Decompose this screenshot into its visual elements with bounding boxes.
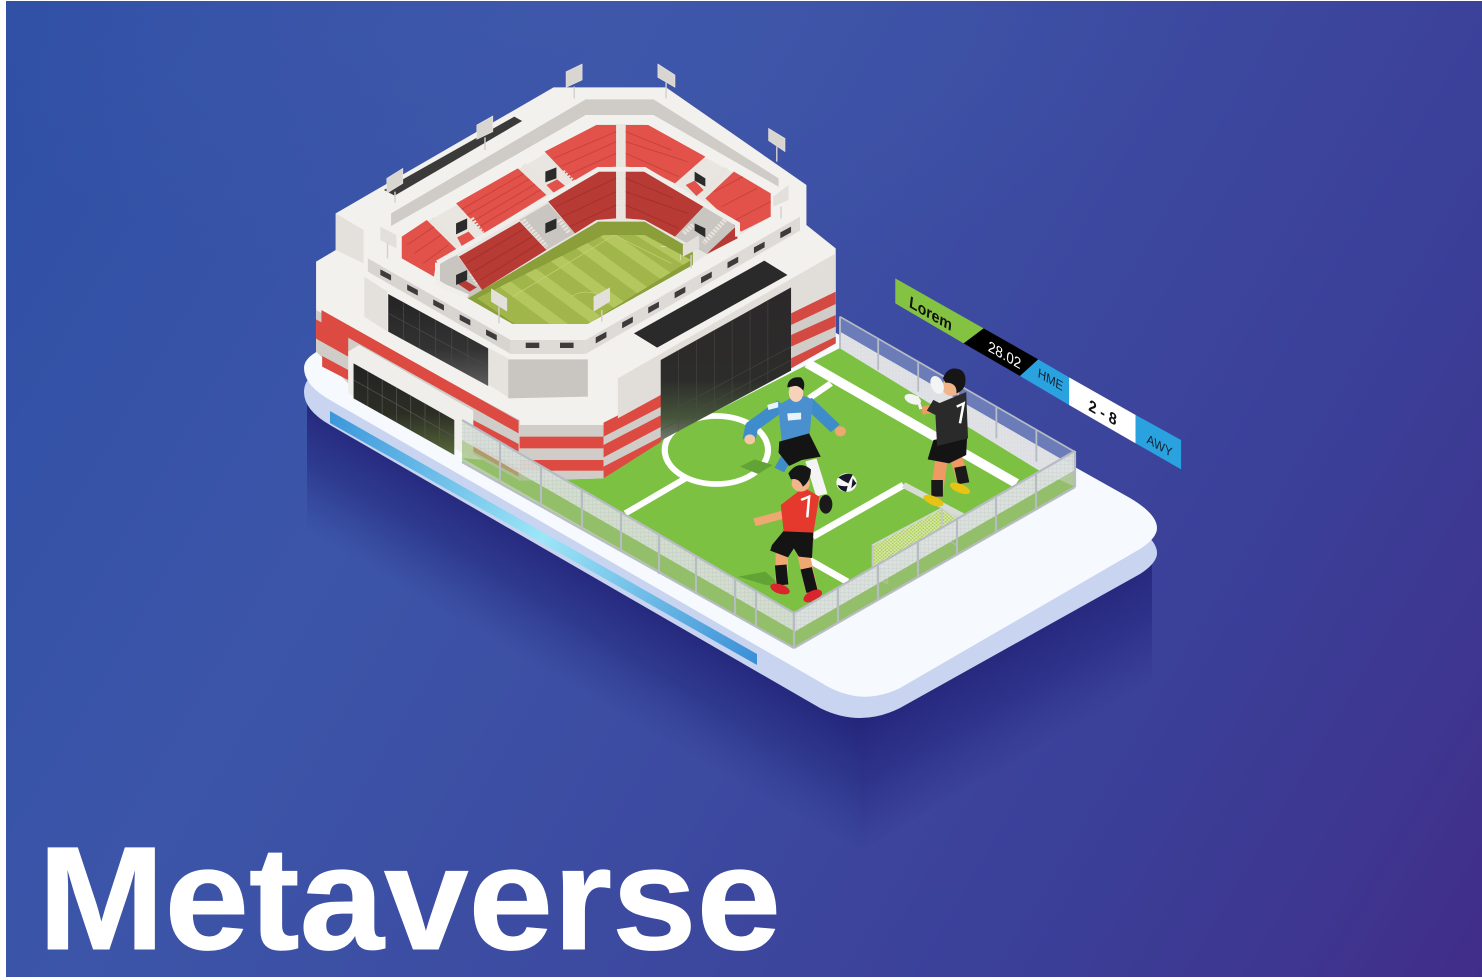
back roof strip xyxy=(384,117,522,196)
pitch markings xyxy=(625,363,1016,582)
right wall stripes xyxy=(791,292,836,368)
front chamfer stripes xyxy=(520,425,604,481)
front grey panel xyxy=(508,359,588,398)
phone top surface xyxy=(304,333,1157,697)
gate opening xyxy=(661,287,791,441)
pitch surround xyxy=(468,222,693,324)
stadium silhouette xyxy=(316,87,836,481)
label: Lorem: Lorem xyxy=(908,294,953,335)
phone shadow xyxy=(307,395,1152,850)
upper tier seats xyxy=(402,125,771,277)
bowl concourse xyxy=(402,124,771,324)
label: score: 2 - 8 xyxy=(1088,397,1118,430)
player: black kit xyxy=(903,369,972,509)
score segments xyxy=(895,278,1181,469)
player: red shirt xyxy=(738,465,824,605)
goal xyxy=(873,508,956,583)
front right fence xyxy=(794,451,1075,648)
upper right wall xyxy=(618,253,836,418)
smartphone body xyxy=(304,333,1157,718)
football xyxy=(836,473,857,492)
front left fence xyxy=(462,420,794,648)
label: away: AWY xyxy=(1146,431,1173,460)
right chamfer stripes xyxy=(604,393,661,478)
entrance block xyxy=(348,345,473,458)
stairs xyxy=(432,125,727,285)
lower tier seats xyxy=(457,172,737,292)
back fence xyxy=(840,317,1075,487)
lower window xyxy=(354,363,454,455)
stadium pitch xyxy=(477,235,690,324)
stadium xyxy=(316,64,836,481)
upper left panels xyxy=(364,277,387,332)
vomitories xyxy=(456,167,705,285)
tier ring xyxy=(437,169,737,297)
label: date: 28.02 xyxy=(987,338,1022,373)
left striped wall xyxy=(316,310,520,481)
roof recess xyxy=(634,261,787,348)
phone screen strip xyxy=(330,411,757,665)
title: Metaverse xyxy=(38,817,781,980)
football pitch xyxy=(462,348,1075,648)
lower seat rows xyxy=(466,178,687,280)
seat rows xyxy=(407,132,771,263)
upper window xyxy=(388,294,488,386)
floodlights xyxy=(380,64,789,323)
window band xyxy=(368,217,800,354)
players and ball xyxy=(738,369,972,605)
player: blue shirt kicker xyxy=(740,377,846,514)
lower bowl grey blocks xyxy=(439,203,737,298)
scoreboard ribbon xyxy=(895,278,1181,469)
label: home: HME xyxy=(1037,365,1064,394)
inner grey wall xyxy=(391,99,779,226)
phone side xyxy=(304,358,1157,718)
